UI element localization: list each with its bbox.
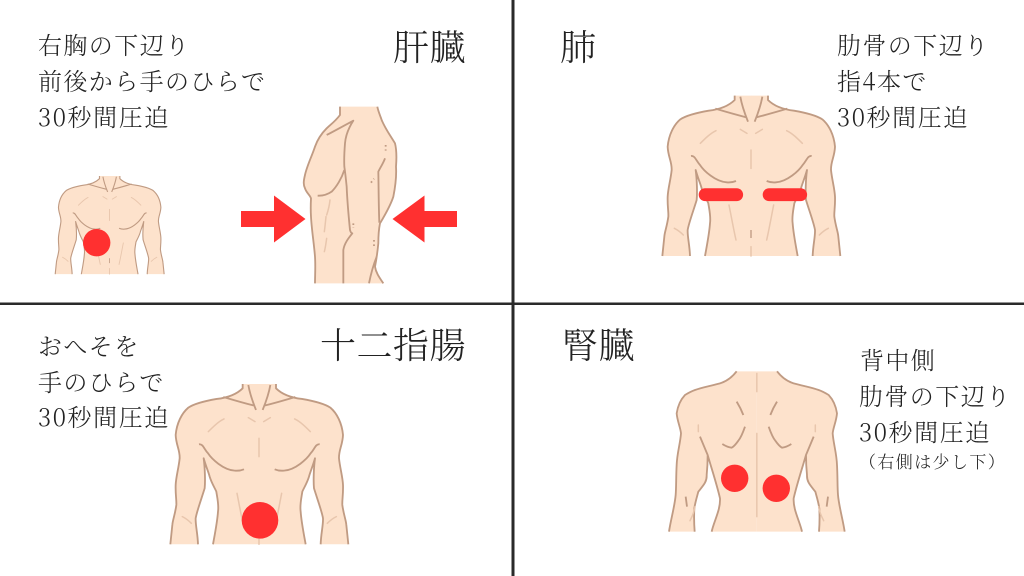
text: lung instructions: 指4本で	[837, 62, 928, 97]
heading: duodenum: 十二指腸	[320, 318, 466, 369]
marker: left kidney point	[721, 465, 748, 492]
panel divider: horizontal line	[0, 302, 1024, 305]
marker: liver point	[83, 229, 110, 256]
marker: right rib band	[763, 188, 807, 201]
illustration: small front torso	[55, 176, 164, 274]
text: duodenum instructions: おへそを	[38, 327, 140, 362]
illustration: front torso	[170, 384, 348, 544]
marker: right kidney point	[763, 475, 790, 502]
text: kidney instructions: 肋骨の下辺り	[859, 377, 1011, 412]
heading: liver: 肝臓	[393, 20, 466, 71]
text: kidney instructions: 背中側	[860, 341, 936, 376]
panel divider: vertical line	[512, 0, 514, 576]
text: lung instructions	[837, 26, 989, 133]
text: liver instructions	[38, 26, 266, 133]
illustration: front torso	[662, 96, 840, 256]
marker: navel point	[242, 502, 278, 539]
text: liver instructions: 右胸の下辺り	[38, 26, 190, 61]
text: kidney instructions: 30秒間圧迫	[859, 413, 991, 448]
text: duodenum instructions: 手のひらで	[38, 363, 165, 398]
text: kidney instructions: （右側は少し下）	[859, 448, 1006, 473]
panel: lung	[560, 20, 989, 256]
text: liver instructions: 30秒間圧迫	[38, 98, 170, 133]
heading: kidney: 腎臓	[562, 318, 635, 369]
illustration: back torso	[669, 371, 845, 532]
text: duodenum instructions: 30秒間圧迫	[38, 398, 170, 433]
text: lung instructions: 30秒間圧迫	[837, 98, 969, 133]
text: liver instructions: 前後から手のひらで	[38, 62, 266, 97]
heading: lung: 肺	[560, 20, 597, 71]
panel: liver	[38, 20, 466, 283]
arrow: from front	[241, 196, 306, 242]
arrow: from back	[392, 196, 457, 242]
illustration: side view torso	[304, 107, 396, 283]
text: kidney instructions	[859, 341, 1011, 473]
marker: left rib band	[699, 188, 743, 201]
panel: kidney	[562, 318, 1011, 532]
text: duodenum instructions	[38, 327, 170, 433]
text: lung instructions: 肋骨の下辺り	[837, 26, 989, 61]
panel: duodenum	[38, 318, 466, 544]
